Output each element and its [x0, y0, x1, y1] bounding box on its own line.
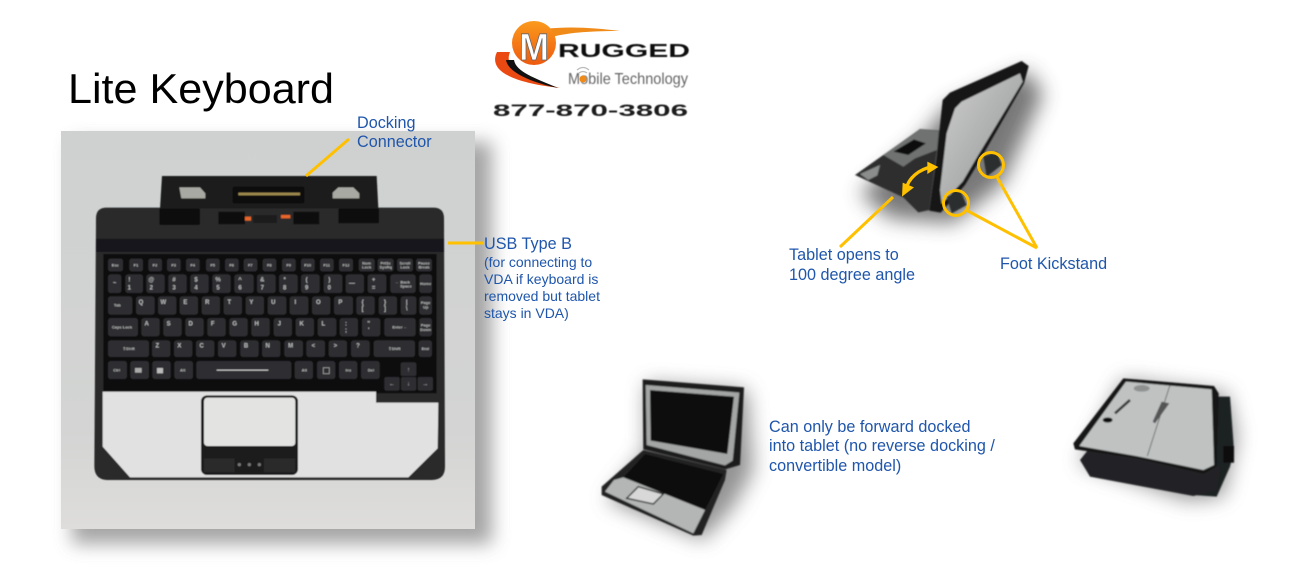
logo: Rugged Mobile Technology: 877-870-3806 [493, 101, 688, 120]
keys: ) [328, 278, 330, 284]
keys: N [266, 343, 270, 349]
keys: ← Back [395, 279, 411, 284]
keys: Del [368, 367, 374, 372]
callout line: USB [448, 242, 484, 244]
keys: 5 [216, 285, 220, 291]
keys: G [232, 321, 237, 327]
keys: ] [384, 307, 386, 313]
keys: ⇧Shift [388, 346, 401, 351]
logo: Rugged Mobile Technology: M [519, 27, 549, 69]
keys: = [372, 285, 376, 291]
callout: USB Type B: stays in VDA) [484, 305, 569, 321]
keys: — [349, 281, 355, 287]
keys: R [205, 300, 210, 306]
callout line: tablet opening [840, 197, 893, 247]
keys: Down [420, 327, 432, 332]
keys: 9 [305, 285, 309, 291]
keys: Page [421, 323, 431, 328]
keys: Pause [418, 260, 431, 265]
keys: ↑ [407, 367, 410, 373]
keys: 1 [128, 285, 132, 291]
touchpad [201, 395, 298, 475]
keys: Enter ← [392, 325, 408, 330]
keys: & [260, 278, 265, 284]
keys: W [161, 300, 167, 306]
icon: kickstand foot circle upper [978, 152, 1004, 178]
keys: Num [362, 260, 372, 265]
callout: USB Type B: USB Type B [484, 235, 572, 253]
callout: tablet opens: Tablet opens to [789, 246, 899, 264]
callout: docking connector: Docking [357, 114, 415, 132]
keys: F6 [229, 263, 235, 268]
callout: forward docking note: into tablet (no reverse docking / [769, 437, 995, 455]
keys: O [316, 300, 321, 306]
keys: ' [368, 328, 370, 334]
keys: Home [420, 281, 432, 286]
keys: F12 [343, 263, 350, 268]
icon: open-angle arrow [902, 162, 938, 197]
palm rest [103, 392, 438, 477]
keys: Lock [362, 264, 372, 269]
keys: U [271, 300, 275, 306]
keys: 3 [172, 285, 176, 291]
keys: T [228, 300, 232, 306]
icon: kickstand foot circle lower [944, 190, 968, 216]
keys: 0 [328, 285, 332, 291]
callout: forward docking note: Can only be forward docked [769, 418, 971, 436]
keys: X [177, 343, 181, 349]
keys: Lock [400, 264, 410, 269]
keys [108, 258, 433, 391]
keys: @ [148, 278, 154, 284]
keys: " [367, 321, 370, 327]
keys: \ [406, 307, 408, 313]
keys: Break [418, 264, 430, 269]
keys: Ins [345, 367, 352, 372]
keys: $ [194, 278, 198, 284]
keys: L [322, 321, 326, 327]
keys: J [278, 321, 281, 327]
keys: ^ [238, 278, 242, 284]
keys: Y [249, 300, 253, 306]
keys: ? [356, 343, 360, 349]
keys: 2 [150, 285, 154, 291]
callout: docking connector: Connector [357, 133, 432, 151]
keys: > [334, 343, 338, 349]
logo: Rugged Mobile Technology: RUGGED [558, 41, 690, 61]
keys: ! [128, 278, 130, 284]
keys: E [183, 300, 187, 306]
keys: : [345, 321, 347, 327]
keys: A [145, 321, 150, 327]
keys: Scroll [399, 260, 411, 265]
keys: F5 [210, 263, 216, 268]
keys: Q [139, 300, 144, 306]
keys: # [172, 278, 176, 284]
keys: Up [423, 304, 429, 309]
keys: F2 [153, 263, 158, 268]
keys: ← [389, 381, 395, 387]
keys: Tab [114, 303, 121, 308]
keys: K [300, 321, 305, 327]
keys: % [215, 278, 221, 284]
keys: + [372, 278, 376, 284]
keys: Space [400, 283, 413, 288]
keys: D [189, 321, 194, 327]
keyboard body [94, 208, 445, 480]
keys: M [288, 343, 293, 349]
keys: ~ [113, 281, 117, 287]
title: Lite Keyboard [68, 65, 334, 112]
keys: PrtSc [380, 260, 392, 265]
keys: V [222, 343, 226, 349]
callout: foot kickstand: Foot Kickstand [1000, 255, 1107, 273]
keys: B [244, 343, 249, 349]
keys: C [200, 343, 205, 349]
docking module [159, 176, 379, 225]
keys: ⇧Shift [123, 346, 135, 351]
keys: { [361, 300, 364, 306]
keys: SysRq [379, 264, 392, 269]
keys: I [294, 300, 296, 306]
callout: USB Type B: removed but tablet [484, 288, 600, 304]
keys: Ctrl [113, 367, 120, 372]
keys: F4 [190, 263, 196, 268]
keys: P [338, 300, 342, 306]
keys: F3 [171, 263, 177, 268]
keys: 4 [194, 285, 198, 291]
photo: forward docked laptop [602, 379, 753, 540]
callout line: docking connector [306, 139, 349, 176]
keys: F [211, 321, 215, 327]
keys: ( [306, 278, 308, 284]
callout: tablet opens: 100 degree angle [789, 266, 915, 284]
logo: Rugged Mobile Technology [493, 21, 690, 120]
photo: keyboard [61, 131, 492, 544]
keys: 6 [238, 285, 242, 291]
keys: } [384, 300, 387, 306]
keys: Alt [302, 367, 308, 372]
photo: closed tablet on keyboard [1073, 378, 1237, 500]
keys: 7 [261, 285, 265, 291]
keys: End [422, 346, 430, 351]
keys: * [283, 278, 286, 284]
callout: forward docking note: convertible model) [769, 457, 901, 475]
keys: ↓ [407, 381, 410, 387]
keys: Caps Lock [112, 324, 133, 329]
keys: < [312, 343, 316, 349]
keys: 8 [283, 285, 287, 291]
keys: F7 [248, 263, 253, 268]
logo: Rugged Mobile Technology: Mobile Technology [568, 71, 688, 88]
callout: USB Type B [484, 235, 600, 321]
keys: Page [421, 300, 431, 305]
keys: Alt [180, 367, 186, 372]
keys: S [167, 321, 171, 327]
keys: Esc [112, 263, 120, 268]
callout: USB Type B: (for connecting to [484, 254, 592, 270]
callout lines: foot kickstand [966, 177, 1037, 248]
key well [103, 254, 437, 393]
keys: ; [345, 328, 347, 334]
keys: | [406, 300, 408, 306]
keys: F11 [323, 263, 331, 268]
keys: Z [156, 343, 160, 349]
photo: tablet open with kickstand [855, 61, 1043, 223]
keys: F9 [286, 263, 292, 268]
keys: H [255, 321, 259, 327]
keys: [ [362, 307, 364, 313]
callout: USB Type B: VDA if keyboard is [484, 271, 598, 287]
keys: F10 [304, 263, 312, 268]
keys: → [422, 381, 428, 387]
keys: F1 [134, 263, 139, 268]
keys: F8 [267, 263, 272, 268]
